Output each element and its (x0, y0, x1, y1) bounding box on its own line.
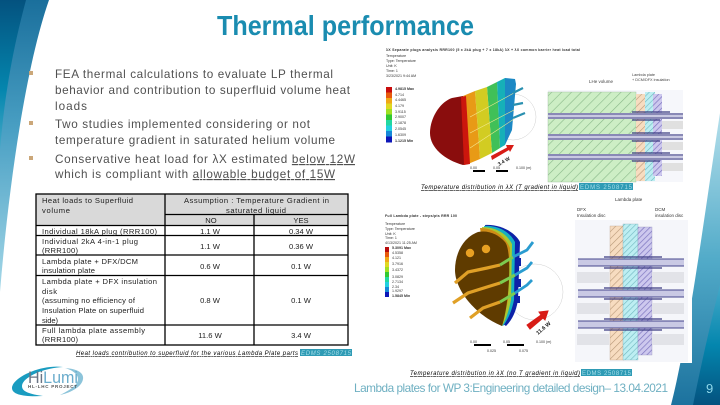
page number: 9 (706, 381, 713, 396)
table header (42, 196, 329, 225)
temperature legend: 1.9297 (392, 289, 403, 293)
temperature legend: 4.179 (395, 104, 404, 108)
right corner swoosh (671, 113, 720, 405)
temperature legend: 1.6309 (395, 133, 406, 137)
top figure caption: EDMS 2508715 (580, 185, 633, 191)
HiLumi logo (12, 367, 83, 396)
row: full assembly: Full lambda plate assembly (42, 326, 145, 335)
temperature legend: 3.7916 (392, 262, 403, 266)
temperature legend: 2.1878 (395, 121, 406, 125)
row: 18kA plug: Individual 18kA plug (RRR100) (42, 227, 157, 236)
temperature legend: 4.9815 Max (395, 87, 414, 91)
temperature legend: 4.5358 (392, 251, 403, 255)
heat load arrow 11.6W: 11.6 W (535, 320, 553, 337)
temperature legend: 2.0545 (395, 127, 406, 131)
temperature legend: 4.4465 (395, 98, 406, 102)
thermal model: disc with plugs (453, 225, 563, 326)
bottom figure caption: EDMS 2508715 (582, 371, 632, 377)
row: lambda plate and DFX/DCM plate (42, 257, 312, 275)
cross-section drawing: DCM (655, 207, 665, 212)
temperature legend (386, 87, 414, 143)
simulation header text: Type: Temperature (386, 59, 416, 63)
scale bar (470, 340, 551, 353)
simulation header text: Time: 1 (386, 69, 398, 73)
bullet 2 (29, 118, 335, 147)
simulation header text (386, 48, 580, 78)
row: 2kA plug: 1.1 W (200, 242, 221, 251)
cross-section drawing: Lambda plate (615, 197, 643, 202)
bullet 2: temperature gradient in saturated helium volume (55, 134, 335, 147)
scale bar: 0.075 (519, 349, 528, 353)
table header: NO (205, 216, 217, 225)
cross-section drawing: insulation disc (655, 213, 684, 218)
heat loads table (36, 194, 348, 345)
scale bar: 0.100 (m) (536, 340, 551, 344)
cross-section drawing: Insulation disc (577, 213, 606, 218)
row: full assembly: 3.4 W (291, 331, 312, 340)
cross-section drawing (548, 73, 683, 182)
table header: volume (42, 206, 70, 215)
cross-section drawing: LHe volume (589, 79, 614, 84)
row: full assembly (42, 326, 312, 344)
bullet 1 (29, 68, 351, 113)
left corner swoosh (0, 0, 49, 292)
row: 2kA plug (42, 237, 314, 255)
scale bar: 0.025 (487, 349, 496, 353)
row: 18kA plug: 1.1 W (200, 227, 221, 236)
simulation header text: Temperature (385, 222, 405, 226)
bullet 1: behavior and contribution to superfluid volume heat (55, 84, 351, 97)
row: lambda plate and DFX disk: 0.1 W (291, 296, 312, 305)
temperature legend: 4.121 (392, 256, 401, 260)
row: lambda plate and DFX/DCM plate: insulation plate (42, 266, 95, 275)
cross-section drawing: + DCM/DFX insulation (632, 78, 670, 82)
row: 2kA plug: Individual 2kA 4-in-1 plug (42, 237, 138, 246)
temperature legend: 2.7134 (392, 280, 403, 284)
table header: YES (293, 216, 309, 225)
bullet 1: loads (55, 100, 87, 113)
row: 2kA plug: 0.36 W (289, 242, 314, 251)
HiLumi logo: HiLumi (28, 368, 78, 387)
bottom figure caption: Temperature distribution in λX (no T gradient in liquid) (410, 371, 580, 377)
simulation header text: Unit: K (386, 64, 397, 68)
temperature legend (385, 246, 411, 298)
top figure caption (421, 183, 633, 191)
row: full assembly: 11.6 W (198, 331, 223, 340)
cross-section drawing (575, 197, 688, 362)
scale bar: 0.05 (503, 340, 510, 344)
simulation header text (385, 214, 457, 245)
scale bar: 0.100 (m) (516, 166, 531, 170)
temperature legend: 3.0829 (392, 275, 403, 279)
bullet 2: Two studies implemented considering or not (55, 118, 311, 131)
temperature legend: 5.3091 Max (392, 246, 411, 250)
simulation header text: 3/23/2021 9:44 AM (386, 74, 416, 78)
bullet 3: Conservative heat load for λX estimated below 12W (55, 153, 355, 166)
temperature legend: 3.9115 (395, 110, 406, 114)
row: lambda plate and DFX disk: (assuming no efficiency of (42, 296, 136, 305)
temperature legend: 4.714 (395, 93, 404, 97)
temperature legend: 2.34 (392, 285, 399, 289)
simulation header text: λX Separate plugs analysis RRR100 (5 x 2kA plug + 7 x 18kA) λX + λX common barrier heat load total (386, 48, 580, 52)
bottom figure caption (410, 369, 632, 377)
table caption (76, 349, 352, 357)
top figure caption: Temperature distribution in λX (T gradient in liquid) (421, 185, 578, 191)
row: lambda plate and DFX disk: disk (42, 287, 57, 296)
title: Thermal performance (217, 10, 474, 41)
row: lambda plate and DFX disk: Insulation Plate on superfluid (42, 306, 144, 315)
scale bar (470, 166, 531, 172)
table caption: Heat loads contribution to superfluid for the various Lambda Plate parts (76, 351, 298, 357)
simulation header text: Full Lambda plate - steps/pts RRR 100 (385, 214, 457, 218)
temperature legend: 2.9007 (395, 115, 406, 119)
heat load arrow 11.6W (527, 311, 553, 337)
bottom figure (384, 196, 692, 363)
table header: Assumption : Temperature Gradient in (184, 196, 329, 205)
simulation header text: Time: 1 (385, 236, 397, 240)
table caption: EDMS 2508715 (301, 351, 352, 357)
thermal model: cylinder (430, 78, 536, 165)
row: lambda plate and DFX/DCM plate: Lambda plate + DFX/DCM (42, 257, 138, 266)
row: 18kA plug (42, 227, 314, 236)
row: lambda plate and DFX/DCM plate: 0.6 W (200, 262, 221, 271)
row: lambda plate and DFX disk (42, 277, 312, 325)
scale bar: 0.05 (493, 166, 500, 170)
bullet 3: which is compliant with allowable budget of 15W (54, 168, 335, 181)
simulation header text: Temperature (386, 54, 406, 58)
row: full assembly: (RRR100) (42, 335, 78, 344)
table header: Heat loads to Superfluid (42, 196, 133, 205)
row: 18kA plug: 0.34 W (289, 227, 314, 236)
simulation header text: Unit: K (385, 232, 396, 236)
simulation header text: 4/13/2021 11:25 AM (385, 241, 417, 245)
temperature legend: 3.4372 (392, 268, 403, 272)
top figure (382, 44, 690, 183)
scale bar: 0.00 (470, 340, 477, 344)
row: lambda plate and DFX/DCM plate: 0.1 W (291, 262, 312, 271)
row: lambda plate and DFX disk: 0.8 W (200, 296, 221, 305)
temperature legend: 1.5845 Min (392, 294, 410, 298)
footer text: Lambda plates for WP 3:Engineering detailed design– 13.04.2021 (354, 381, 668, 395)
bullet list (29, 68, 355, 181)
simulation header text: Type: Temperature (385, 227, 415, 231)
HiLumi logo: HL-LHC PROJECT (28, 384, 77, 389)
cross-section drawing: DFX (577, 207, 586, 212)
cross-section drawing: Lambda plate (632, 73, 655, 77)
heat load arrow 3.4W (491, 145, 514, 168)
row: 2kA plug: (RRR100) (42, 246, 78, 255)
bullet 3 (29, 153, 355, 181)
bullet 1: FEA thermal calculations to evaluate LP thermal (55, 68, 333, 81)
table header: saturated liquid (226, 206, 286, 215)
row: lambda plate and DFX disk: Lambda plate + DFX insulation (42, 277, 157, 286)
row: lambda plate and DFX disk: side) (42, 316, 58, 325)
heat load arrow 3.4W: 3.4 W (497, 156, 512, 168)
temperature legend: 1.1215 Min (395, 139, 413, 143)
scale bar: 0.00 (470, 166, 477, 170)
